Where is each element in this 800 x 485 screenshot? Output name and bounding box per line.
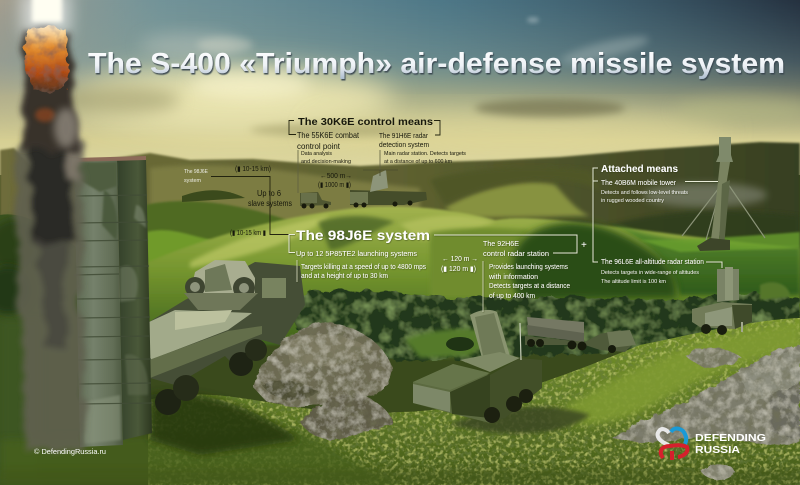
text: 92H6E note: with information <box>488 272 538 281</box>
text: 92H6E note: Provides launching systems <box>489 262 568 271</box>
text: 92H6E control radar station: control radar station <box>483 249 549 258</box>
panel: slave systems <box>184 166 292 237</box>
connector: radar to antenna <box>380 150 381 170</box>
title: The S-400 «Triumph» air-defense missile system <box>88 48 785 80</box>
wordmark: RUSSIA <box>695 444 740 456</box>
text: 120 m spacing bottom: (▮ 120 m ▮) <box>441 266 476 273</box>
connector: 98J6E to 92H6E <box>434 235 577 253</box>
text: tower note: Detects and follows low-level threats <box>601 190 688 196</box>
tower 40B6M <box>682 137 765 251</box>
connector: combat control point to vehicle <box>298 150 299 193</box>
text: main radar station note: Main radar station. Detects targets <box>384 151 466 157</box>
background: forest belt <box>295 282 800 365</box>
connector: 98J6E bracket <box>289 234 295 252</box>
missile launch plume: smoke <box>17 128 85 450</box>
connector: 96L6E line <box>706 262 722 268</box>
text: data analysis note: Data analysis <box>301 151 332 157</box>
background: central sunlit hills <box>148 206 800 345</box>
text: 96L6E note: The altitude limit is 100 km <box>601 279 666 285</box>
heading: 98J6E system: The 98J6E system <box>296 227 430 243</box>
connector: slave systems bracket <box>211 176 290 234</box>
text: tower note: in rugged wooded country <box>601 198 664 204</box>
rocks: large boulders <box>253 322 393 440</box>
connector: 92H6E line <box>482 261 484 312</box>
heading: attached means: Attached means <box>601 164 678 175</box>
text: launching systems note: Targets killing at a speed of up to 4800 mps <box>301 264 426 271</box>
missile container tubes <box>74 156 152 447</box>
text: 96L6E note: Detects targets in wide-range of altitudes <box>601 270 699 276</box>
text: 92H6E control radar station: The 92H6E <box>483 239 519 248</box>
launcher truck 5P85TE2 <box>149 260 305 415</box>
panel: attached means <box>593 164 722 285</box>
text: launching systems note: and at a height of up to 30 km <box>301 273 388 280</box>
vehicle: 91H6E radar detection system <box>350 170 427 208</box>
text: 96L6E all-altitude radar station: The 96L6E all-altitude radar station <box>601 257 704 266</box>
missile launch plume: fire <box>20 0 78 150</box>
background: foreground meadow <box>0 318 800 485</box>
panel: 98J6E system <box>289 227 587 312</box>
launcher truck in the distance <box>525 317 636 353</box>
radar vehicle 92H6E <box>413 310 542 423</box>
text: 98J6E system small label: The 98J6E <box>184 169 208 175</box>
background: distant hills <box>0 142 800 300</box>
text: launching systems: Up to 12 5P85TE2 launching systems <box>296 249 417 258</box>
text: lower 10-15 km: (▮ 10-15 km ▮ <box>230 230 266 237</box>
connector: tower line <box>685 180 718 182</box>
radar station 96L6E <box>692 267 752 335</box>
text: main radar station note: at a distance of up to 600 km <box>384 159 452 165</box>
text: up to 6 slave systems: Up to 6 <box>257 189 282 198</box>
heading: 30K6E control means: The 30K6E control means <box>298 116 433 128</box>
logo: Defending Russia <box>658 428 766 460</box>
text: 500 m spacing: ←500 m→ <box>320 173 352 180</box>
text: 92H6E note: Detects targets at a distance <box>489 281 570 290</box>
text: 40B6M mobile tower: The 40B6M mobile tower <box>601 178 676 187</box>
text: 120 m spacing top: ← 120 m → <box>442 256 478 263</box>
vehicle: 55K6E control point <box>300 192 331 208</box>
text: 98J6E system small label: system <box>184 178 201 184</box>
text: up to 6 slave systems: slave systems <box>248 199 292 208</box>
copyright: © DefendingRussia.ru <box>34 447 106 456</box>
text: 91H6E radar detection system: The 91H6E radar <box>379 131 428 140</box>
panel: 30K6E control means <box>289 116 466 193</box>
connector: attached means bracket <box>593 168 598 262</box>
text: 92H6E note: of up to 400 km <box>489 291 535 300</box>
text: 55K6E combat control point: control point <box>297 142 341 151</box>
wordmark: DEFENDING <box>695 432 766 444</box>
text: 1000 m spacing: (▮ 1000 m ▮) <box>318 182 351 189</box>
text: 55K6E combat control point: The 55K6E combat <box>297 131 360 140</box>
text: 91H6E radar detection system: detection system <box>379 140 429 149</box>
connector: control means bracket <box>289 120 440 135</box>
icon: logo hearts <box>658 428 687 460</box>
connector: launching systems line <box>296 260 298 282</box>
plus sign: + <box>581 240 587 251</box>
text: data analysis note: and decision-making <box>301 159 351 165</box>
text: top 10-15 km: (▮ 10-15 km) <box>235 166 271 173</box>
background: sky <box>0 0 800 175</box>
rocks on the right <box>612 345 800 480</box>
background: left valley hills <box>0 190 300 485</box>
